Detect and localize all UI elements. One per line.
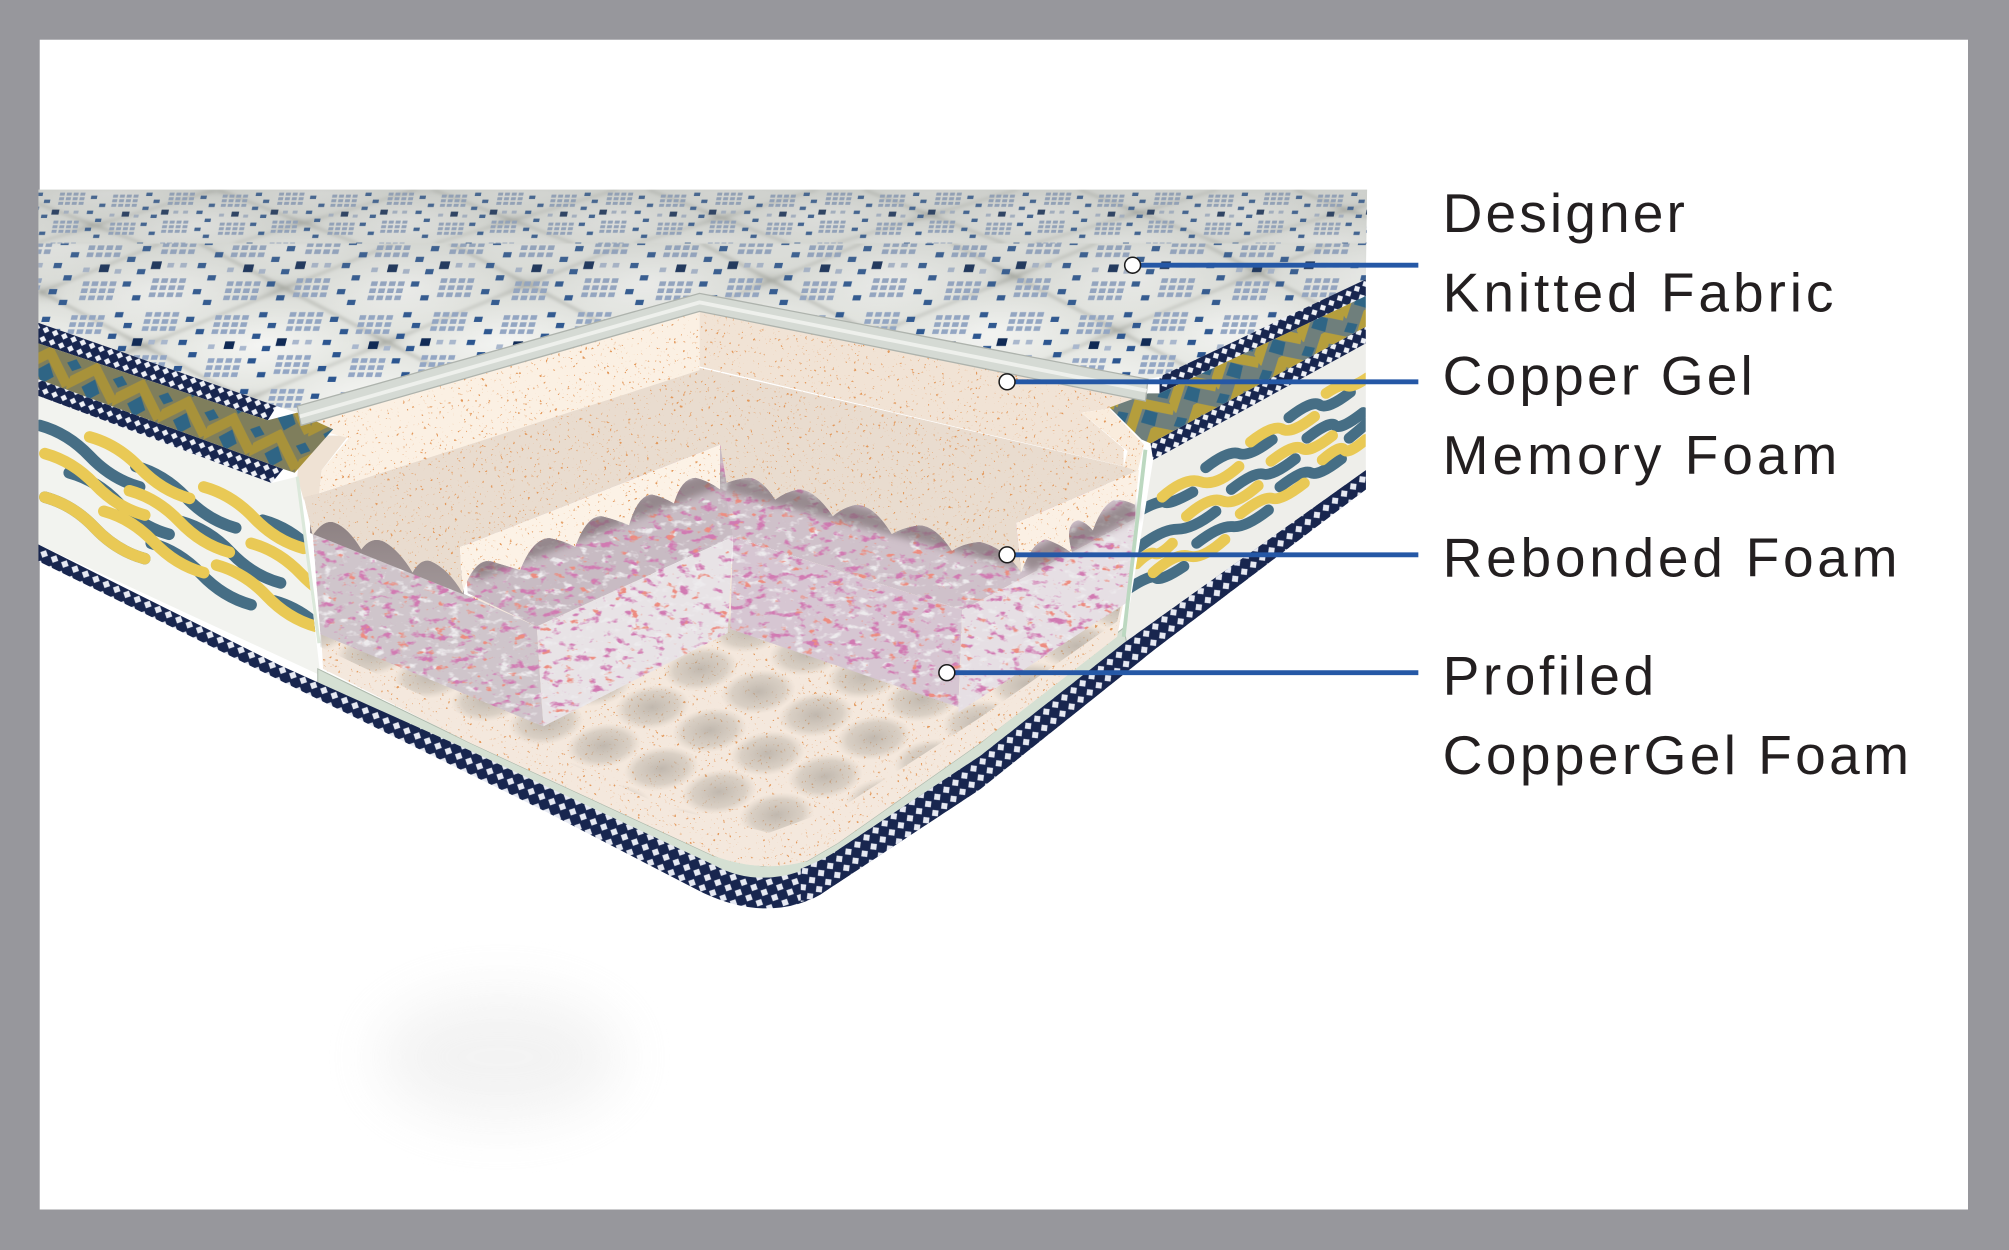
callout: rebonded foam	[999, 527, 1898, 589]
upper slab right wall	[700, 311, 1145, 466]
upper slab left wall	[301, 311, 700, 493]
panel: copper gel memory foam upper slab	[301, 311, 1145, 493]
mattress illustration	[38, 190, 1367, 908]
scallop shadow front left	[310, 507, 464, 595]
panel: rebonded foam block	[313, 436, 1135, 726]
slab light wall right	[1016, 470, 1139, 573]
tape highlight	[300, 302, 1147, 416]
right lower piping	[1151, 327, 1366, 460]
bottom piping right run	[801, 470, 1366, 902]
panel: left side fabric	[38, 396, 320, 674]
callout: profiled coppergel foam: Profiled	[1443, 644, 1654, 706]
panel: right side fabric	[1124, 343, 1367, 643]
left green edge strip	[297, 477, 319, 643]
foam tip backing left	[297, 436, 348, 500]
callout: designer knitted fabric: Knitted Fabric	[1443, 261, 1833, 323]
upper slab right notch	[1081, 409, 1144, 472]
cut edge border tape	[297, 293, 1148, 425]
callout: designer knitted fabric: Designer	[1443, 182, 1685, 244]
slab tan surface and front faces	[304, 368, 1139, 593]
callout: profiled coppergel foam: CopperGel Foam	[1443, 724, 1909, 786]
right upper piping	[1160, 279, 1366, 393]
rebonded left face	[313, 533, 543, 726]
callout: profiled coppergel foam	[939, 644, 1909, 786]
soft floor shadow	[378, 993, 621, 1121]
panel: copper gel memory foam lower slab	[304, 368, 1139, 593]
rebonded inner face	[730, 537, 962, 707]
left lower piping	[38, 379, 283, 483]
rebonded centre light face	[537, 537, 733, 726]
left woven band	[38, 343, 333, 473]
bottom border tape	[318, 628, 1128, 884]
rebonded top surface right	[720, 461, 1135, 610]
bottom navy piping	[38, 470, 1366, 908]
rebonded top surface left	[464, 436, 733, 627]
callout: rebonded foam: Rebonded Foam	[1443, 527, 1898, 589]
callout: copper gel memory foam	[999, 345, 1837, 486]
callout: copper gel memory foam: Copper Gel	[1443, 345, 1753, 407]
right green edge strip	[1124, 450, 1145, 637]
callout lines and labels	[939, 182, 1909, 786]
callout: designer knitted fabric	[1125, 182, 1833, 323]
rebonded right light face	[958, 519, 1135, 712]
callout: copper gel memory foam: Memory Foam	[1443, 424, 1837, 486]
panel: profiled copper gel foam	[320, 538, 1140, 866]
slab light wall left	[460, 445, 720, 593]
scallop shadow walls	[472, 477, 1135, 571]
left upper piping	[38, 323, 277, 420]
right woven band	[1110, 296, 1366, 443]
panel: quilted top fabric	[38, 190, 1367, 420]
